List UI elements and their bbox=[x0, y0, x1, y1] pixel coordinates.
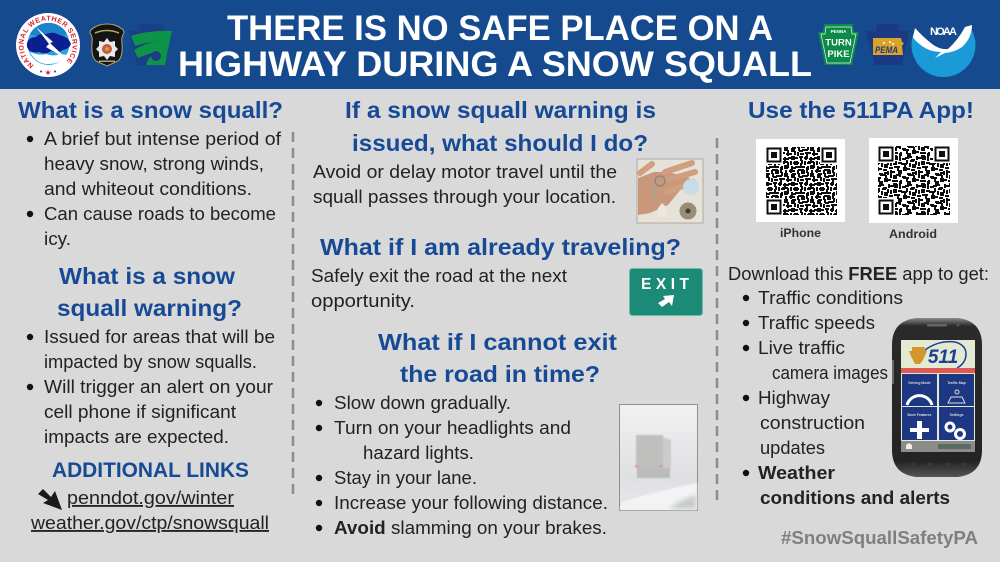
bullet list: warning definition: impacted by snow squalls. bbox=[44, 351, 257, 372]
title: THERE IS NO SAFE PLACE ON A bbox=[227, 9, 773, 48]
bullet list: safety steps: Stay in your lane. bbox=[334, 467, 477, 488]
text: avoid travel: Avoid or delay motor travel until the bbox=[313, 161, 617, 182]
heading: use the 511PA app: Use the 511PA App! bbox=[748, 97, 974, 123]
bullet list: app features: updates bbox=[760, 437, 825, 458]
image: phone showing 511PA app: Traffic Map bbox=[947, 381, 966, 385]
logo: National Weather Service: ★ bbox=[45, 68, 52, 77]
label: Android: Android bbox=[889, 227, 937, 241]
text: avoid travel bbox=[313, 161, 617, 207]
heading: cannot exit bbox=[378, 329, 617, 387]
logo: Turnpike keystone: PENNA bbox=[831, 29, 847, 34]
logo: PEMA keystone: PEMA bbox=[875, 45, 898, 55]
heading: if a warning is issued bbox=[345, 97, 656, 156]
text: download intro: Download this FREE app to get: bbox=[728, 263, 989, 284]
logo: NOAA bbox=[912, 10, 976, 77]
bullet list: snow squall definition bbox=[27, 128, 282, 249]
text: safely exit: opportunity. bbox=[311, 290, 415, 311]
logo: Turnpike keystone bbox=[818, 24, 859, 65]
QR code: Android bbox=[869, 138, 958, 223]
bullet list: snow squall definition: heavy snow, strong winds, bbox=[44, 153, 264, 174]
panel: left column bbox=[18, 97, 283, 533]
image: phone showing 511PA app: Driving Mode bbox=[908, 381, 931, 385]
bullet list: warning definition: Will trigger an alert on your bbox=[44, 376, 273, 397]
bullet list: app features: conditions and alerts bbox=[760, 487, 950, 508]
hashtag: #SnowSquallSafetyPA bbox=[781, 527, 978, 548]
divider: right bbox=[716, 138, 718, 500]
heading: already traveling: What if I am already traveling? bbox=[320, 234, 681, 260]
divider: left bbox=[292, 132, 294, 500]
bullet list: safety steps: hazard lights. bbox=[363, 442, 474, 463]
heading: if a warning is issued: issued, what should I do? bbox=[352, 130, 648, 156]
bullet list: safety steps: Increase your following distance. bbox=[334, 492, 608, 513]
title: HIGHWAY DURING A SNOW SQUALL bbox=[178, 45, 812, 84]
icon: arrow bbox=[38, 489, 62, 510]
bullet list: app features: Live traffic bbox=[758, 337, 845, 358]
bullet list: app features: Highway bbox=[758, 387, 831, 408]
bullet list: app features: camera images bbox=[772, 362, 888, 383]
icon: exit sign bbox=[630, 268, 702, 316]
bullet list: snow squall definition: A brief but intense period of bbox=[44, 128, 282, 149]
panel: middle column bbox=[311, 97, 703, 538]
heading: additional links: ADDITIONAL LINKS bbox=[52, 459, 249, 482]
heading: what is a snow squall warning bbox=[57, 263, 242, 321]
image: phone showing 511PA app: 511 bbox=[928, 347, 958, 368]
bullet list: snow squall definition: icy. bbox=[44, 228, 71, 249]
text: safely exit: Safely exit the road at the next bbox=[311, 265, 567, 286]
links: weather.gov/ctp/snowsquall bbox=[30, 512, 269, 533]
links: penndot.gov/winter bbox=[67, 487, 234, 508]
bullet list: safety steps: Avoid slamming on your brakes. bbox=[334, 517, 607, 538]
logo: PEMA keystone bbox=[866, 24, 909, 65]
bullet list: app features: Traffic speeds bbox=[758, 312, 875, 333]
header banner bbox=[0, 0, 1000, 89]
logo: National Weather Service: NATIONAL WEATHER SERVICE bbox=[18, 16, 78, 68]
icon: exit sign: EXIT bbox=[641, 276, 690, 293]
logo: State Police badge bbox=[90, 24, 124, 66]
image: phone showing 511PA app bbox=[892, 318, 982, 477]
text: safely exit bbox=[311, 265, 567, 311]
label: iPhone: iPhone bbox=[780, 226, 821, 240]
image: phone showing 511PA app: More Features bbox=[908, 413, 932, 417]
image: phone showing 511PA app: Settings bbox=[950, 413, 963, 417]
bullet list: warning definition: Issued for areas that will be bbox=[44, 326, 275, 347]
bullet list: snow squall definition: Can cause roads to become bbox=[44, 203, 276, 224]
logo: Turnpike keystone: PIKE bbox=[827, 49, 850, 60]
heading: cannot exit: What if I cannot exit bbox=[378, 329, 617, 355]
bullet list: warning definition: cell phone if significant bbox=[44, 401, 236, 422]
bullet list: app features: construction bbox=[760, 412, 865, 433]
bullet list: app features: Traffic conditions bbox=[758, 287, 903, 308]
bullet list: app features: Weather bbox=[758, 462, 835, 483]
heading: if a warning is issued: If a snow squall warning is bbox=[345, 97, 656, 123]
photo: truck in snow bbox=[620, 404, 698, 510]
bullet list: safety steps: Slow down gradually. bbox=[334, 392, 511, 413]
QR code: iPhone bbox=[756, 139, 845, 222]
links bbox=[30, 487, 269, 533]
heading: what is a snow squall warning: What is a snow bbox=[59, 263, 236, 289]
logo: PennDOT keystone bbox=[129, 24, 172, 65]
bullet list: safety steps: Turn on your headlights and bbox=[334, 417, 571, 438]
photo: hand holding keys bbox=[637, 159, 703, 223]
heading: what is a snow squall warning: squall warning? bbox=[57, 295, 242, 321]
bullet list: warning definition bbox=[27, 326, 275, 447]
heading: cannot exit: the road in time? bbox=[400, 361, 600, 387]
title bbox=[178, 9, 812, 84]
logo: Turnpike keystone: TURN bbox=[825, 38, 852, 48]
bullet list: warning definition: impacts are expected. bbox=[44, 426, 229, 447]
bullet list: safety steps bbox=[316, 392, 608, 538]
bullet list: snow squall definition: and whiteout conditions. bbox=[44, 178, 252, 199]
panel: right column bbox=[728, 97, 989, 548]
logo: NOAA: NOAA bbox=[930, 26, 957, 38]
heading: what is a snow squall: What is a snow squall? bbox=[18, 97, 283, 123]
text: avoid travel: squall passes through your location. bbox=[313, 186, 616, 207]
bullet list: app features bbox=[743, 287, 950, 508]
